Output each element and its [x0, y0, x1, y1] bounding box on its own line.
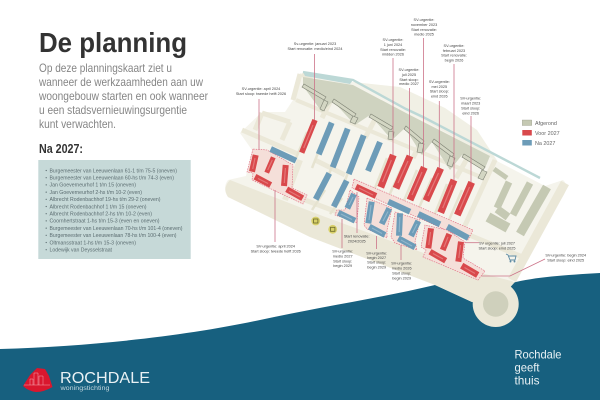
callout: renovatie 2024/2025: 2024/2025	[348, 239, 366, 243]
callout: juli 2025: SV-urgentie:	[399, 68, 419, 72]
list text: Burgemeester van Leeuwenlaan 60-hs t/m 74-3 (even)	[50, 176, 174, 182]
intro text: kunt verwachten.	[39, 118, 116, 131]
background wave	[0, 273, 600, 400]
callout: januari 2023: Sv-urgentie: januari 2023	[294, 42, 336, 46]
callout: maart 2023	[460, 97, 481, 182]
roundabout	[473, 281, 519, 327]
intro text: wanneer de werkzaamheden aan uw	[38, 76, 204, 89]
logo	[23, 368, 150, 392]
list text: Oltmansstraat 1-hs t/m 15-3 (oneven)	[50, 240, 136, 246]
callout: begin 2027: Start sloop:	[367, 261, 386, 265]
list text: Lodewijk van Deysselstraat	[50, 248, 113, 254]
callout: februari 2023	[441, 44, 467, 180]
callout: medio 2027: Start sloop:	[333, 260, 352, 264]
callout: maart 2023: Start sloop:	[461, 107, 480, 111]
callout: juli 2027: Start sloop: eind 2025	[479, 246, 515, 250]
intro text	[38, 62, 208, 131]
slogan: thuis	[514, 373, 540, 387]
callout: mei 2025: eind 2026	[431, 94, 448, 98]
logo mark	[23, 368, 52, 392]
list text: Burgemeester van Leeuwenlaan 78-hs t/m 100-4 (even)	[50, 233, 177, 239]
bottom-left blob and roads	[225, 74, 565, 304]
list text: Coornhertstraat 1-hs t/m 15-3 (even en oneven)	[50, 219, 160, 225]
callout: november 2023: medio 2025	[414, 32, 434, 36]
icon: bus stop 2	[328, 225, 337, 234]
callout: juli 2025: medio 2027	[399, 82, 419, 86]
legend	[522, 120, 560, 147]
callout: juli 2025: juli 2025	[401, 73, 416, 77]
callout: april 2024 top: Start sloop: tweede helft 2026	[236, 92, 286, 96]
callout: 1 juni 2024: midden 2026	[382, 52, 404, 56]
callout: april 2024 bottom: Start sloop: tweede helft 2026	[251, 249, 301, 253]
garden strips	[296, 132, 462, 220]
list text: Albrecht Rodenbachhof 2-hs t/m 10-2 (even)	[50, 212, 152, 218]
callout: medio 2026	[391, 245, 412, 281]
green bank	[303, 77, 490, 170]
callout: maart 2023: maart 2023	[461, 102, 480, 106]
callout: februari 2023: begin 2026	[445, 59, 463, 63]
list text: Jan Goeverneurhof 2-hs t/m 10-2 (even)	[50, 190, 142, 196]
callout: juli 2027: SV urgentie: juli 2027	[479, 241, 515, 245]
intro text: woongebouw starten en ook wanneer	[38, 90, 208, 103]
callout: januari 2023: Start renovatie: medio/eind 2024	[288, 47, 342, 51]
buildings after 2027	[271, 123, 468, 247]
buildings before 2027	[252, 120, 478, 275]
callout: 1 juni 2024	[380, 38, 406, 155]
callout: mei 2025: SV-urgentie:	[429, 80, 450, 84]
callout: begin 2027	[366, 236, 387, 270]
list bullets	[46, 170, 47, 250]
callout: medio 2026: Start sloop:	[392, 272, 411, 276]
callout: begin 2027: SV-urgentie:	[366, 251, 387, 255]
callout: november 2023: Start renovatie:	[411, 28, 437, 32]
slogan: Rochdale	[514, 347, 562, 361]
callout: medio 2026: begin 2029	[392, 277, 411, 281]
legend: after 2027: Na 2027	[535, 141, 555, 147]
callout: januari 2023	[288, 42, 342, 120]
intro text: u een stadsvernieuwingsurgentie	[39, 104, 187, 117]
callout: november 2023: november 2023	[411, 23, 437, 27]
callout: 1 juni 2024: 1 juni 2024	[384, 43, 402, 47]
callout: juli 2025: Start sloop:	[399, 78, 419, 82]
legend: completed: Afgerond	[535, 121, 557, 127]
icon: bus stop 1	[311, 217, 320, 225]
callout: april 2024 top: SV-urgentie: april 2024	[242, 87, 280, 91]
callout: medio 2026: medio 2026	[392, 267, 412, 271]
callout: begin 2024	[482, 253, 586, 276]
logo subtitle: woningstichting	[59, 386, 110, 392]
demolition zones	[247, 149, 485, 280]
callout: februari 2023: SV-urgentie:	[444, 44, 464, 48]
slogan: geeft	[514, 360, 540, 374]
callout: april 2024 top	[236, 87, 286, 150]
callout: medio 2027: begin 2029	[333, 264, 352, 268]
title: De planning	[39, 27, 187, 58]
callout: 1 juni 2024: SV-urgentie:	[383, 38, 403, 42]
callout: begin 2027: begin 2027	[367, 256, 386, 260]
callout: 1 juni 2024: Start renovatie:	[380, 48, 406, 52]
callout: maart 2023: eind 2026	[462, 112, 479, 116]
callout: renovatie 2024/2025	[344, 192, 370, 243]
heading: Na 2027: Na 2027:	[39, 141, 83, 156]
list text: Albrecht Rodenbachhof 1 t/m 15 (oneven)	[50, 204, 147, 210]
callout: begin 2027: begin 2029	[367, 266, 386, 270]
list text: Albrecht Rodenbachhof 19-hs t/m 29-2 (oneven)	[50, 197, 161, 203]
icon: shopping cart	[506, 254, 516, 262]
slogan	[514, 347, 562, 387]
water line	[303, 72, 540, 178]
callout: mei 2025: mei 2025	[431, 85, 447, 89]
callout: april 2024 bottom: SV-urgentie: april 2024	[256, 244, 295, 248]
callout: medio 2027	[332, 219, 353, 268]
callout: medio 2026: SV-urgentie:	[391, 262, 412, 266]
callout: februari 2023: Start renovatie:	[441, 54, 467, 58]
list text: Burgemeester van Leeuwenlaan 70-hs t/m 101-4 (oneven)	[50, 226, 183, 232]
intro text: Op deze planningskaart ziet u	[39, 62, 172, 75]
callout: juli 2025	[399, 68, 419, 156]
legend: before 2027: Voor 2027	[535, 131, 560, 137]
callout: april 2024 bottom	[251, 190, 301, 253]
list text	[50, 168, 183, 254]
completed buildings	[302, 84, 547, 234]
callout: renovatie 2024/2025: Start renovatie:	[344, 234, 370, 238]
callout: medio 2027: medio 2027	[333, 255, 353, 259]
map ground	[353, 82, 500, 165]
panel: street list	[38, 160, 191, 259]
callout: juli 2027	[465, 241, 515, 250]
callout: medio 2027: SV-urgentie:	[332, 250, 353, 254]
list text: Jan Goeverneurhof 1 t/m 15 (oneven)	[50, 183, 136, 189]
logo wordmark: ROCHDALE	[60, 370, 150, 387]
callout: november 2023	[411, 18, 437, 167]
callout: maart 2023: SV-urgentie:	[460, 97, 481, 101]
list text: Burgemeester van Leeuwenlaan 61-1 t/m 75-5 (oneven)	[50, 168, 177, 174]
callout: begin 2024: Start sloop: eind 2025	[547, 258, 584, 262]
callout: november 2023: SV-urgentie:	[414, 18, 434, 22]
callout: mei 2025	[429, 80, 450, 168]
callout: februari 2023: februari 2023	[443, 49, 465, 53]
callout: mei 2025: Start sloop:	[430, 90, 449, 94]
callout: begin 2024: SV-urgentie: begin 2024	[545, 253, 586, 257]
map	[225, 72, 566, 327]
